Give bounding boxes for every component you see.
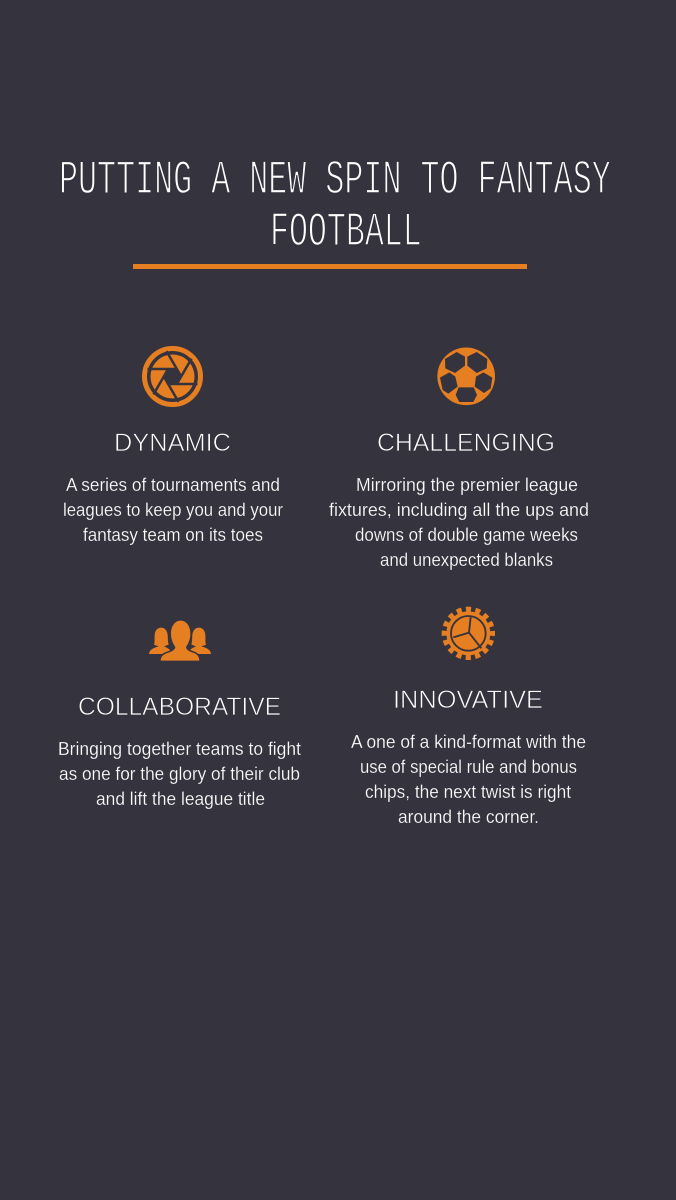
panel: challenging (329, 347, 589, 570)
text: collaborative description: and lift the league title (96, 789, 265, 809)
icon: gear (444, 609, 492, 657)
text: innovative description (351, 732, 586, 827)
title: FOOTBALL (270, 206, 422, 260)
heading: challenging: CHALLENGING (377, 429, 555, 457)
text: collaborative description: Bringing together teams to fight (58, 739, 301, 759)
panel: dynamic (63, 348, 283, 545)
text: innovative description: use of special rule and bonus (360, 757, 577, 777)
text: collaborative description: as one for the glory of their club (59, 764, 300, 784)
text: dynamic description: fantasy team on its toes (83, 525, 263, 545)
text: dynamic description: A series of tournaments and (66, 475, 280, 495)
heading: collaborative: COLLABORATIVE (78, 693, 281, 721)
text: challenging description: fixtures, including all the ups and (329, 500, 589, 520)
text: challenging description: downs of double game weeks (355, 525, 578, 545)
text: collaborative description (58, 739, 301, 809)
text: challenging description: and unexpected blanks (380, 550, 553, 570)
title underline (133, 264, 527, 269)
icon: camera aperture (144, 348, 200, 404)
text: dynamic description: leagues to keep you and your (63, 500, 283, 520)
panel: collaborative (58, 621, 301, 809)
icon: football (437, 347, 495, 405)
heading: dynamic: DYNAMIC (114, 429, 231, 457)
text: dynamic description (63, 475, 283, 545)
title: PUTTING A NEW SPIN TO FANTASY (59, 154, 611, 208)
text: innovative description: around the corner. (398, 807, 539, 827)
icon: group of people (149, 621, 211, 661)
text: innovative description: chips, the next twist is right (365, 782, 571, 802)
title (59, 154, 611, 260)
text: challenging description: Mirroring the premier league (356, 475, 578, 495)
text: innovative description: A one of a kind-format with the (351, 732, 586, 752)
heading: innovative: INNOVATIVE (393, 686, 543, 714)
text: challenging description (329, 475, 589, 570)
panel: innovative (351, 609, 586, 827)
